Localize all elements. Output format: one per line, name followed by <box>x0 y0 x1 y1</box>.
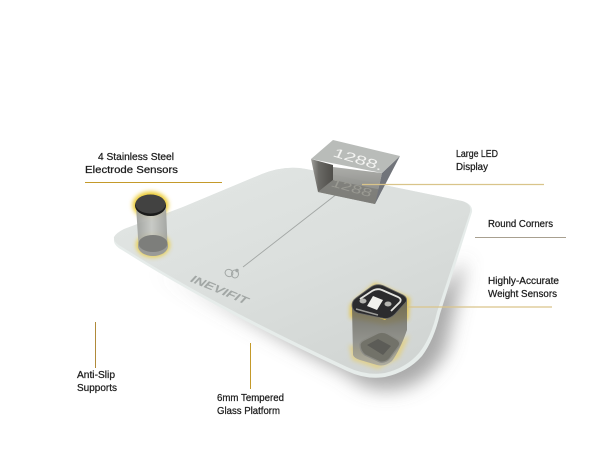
LED digits: 1288. <box>331 146 386 173</box>
lower electrode <box>138 236 168 256</box>
callout: LED display: Display <box>456 162 488 173</box>
callout: weight sensors <box>407 276 559 307</box>
display left wall <box>311 159 333 192</box>
brand wordmark: INEVIFIT <box>187 273 252 306</box>
upper electrode <box>135 195 166 216</box>
weight sensor <box>349 283 410 369</box>
callout: anti-slip supports <box>77 322 117 394</box>
callout: LED display: Large LED <box>456 149 498 160</box>
callout: tempered glass: 6mm Tempered <box>217 393 284 404</box>
LED display <box>311 140 400 204</box>
top chip <box>352 285 407 318</box>
chip silver frame <box>360 289 401 311</box>
callout: weight sensors: Highly-Accurate <box>488 276 559 287</box>
display floor <box>318 180 382 204</box>
callout: tempered glass: Glass Platform <box>217 406 280 417</box>
callout: tempered glass <box>217 343 284 417</box>
callout: LED display <box>362 149 544 184</box>
glass platform <box>114 168 472 378</box>
chip terminals <box>367 296 383 310</box>
callout: electrode sensors: Electrode Sensors <box>85 165 178 176</box>
callout: anti-slip supports: Supports <box>77 383 117 394</box>
drop shadow of platform <box>150 260 466 390</box>
sensor glow <box>350 283 410 325</box>
digits reflection: 1288 <box>329 177 375 200</box>
callout: round corners: Round Corners <box>488 219 553 230</box>
brand logo mark <box>224 268 238 278</box>
display back panel <box>318 167 382 204</box>
callout: electrode sensors <box>85 152 222 182</box>
display top <box>311 140 400 173</box>
callout: weight sensors: Weight Sensors <box>488 289 557 300</box>
lower chip reflection <box>360 332 400 362</box>
callout: electrode sensors: 4 Stainless Steel <box>98 152 174 163</box>
lower glow <box>349 335 410 369</box>
center line <box>243 190 342 267</box>
display right wall <box>375 156 400 204</box>
callout: round corners <box>475 219 566 238</box>
callout: anti-slip supports: Anti-Slip <box>77 370 115 381</box>
left electrode sensor <box>132 192 170 258</box>
sensor column <box>352 300 407 366</box>
